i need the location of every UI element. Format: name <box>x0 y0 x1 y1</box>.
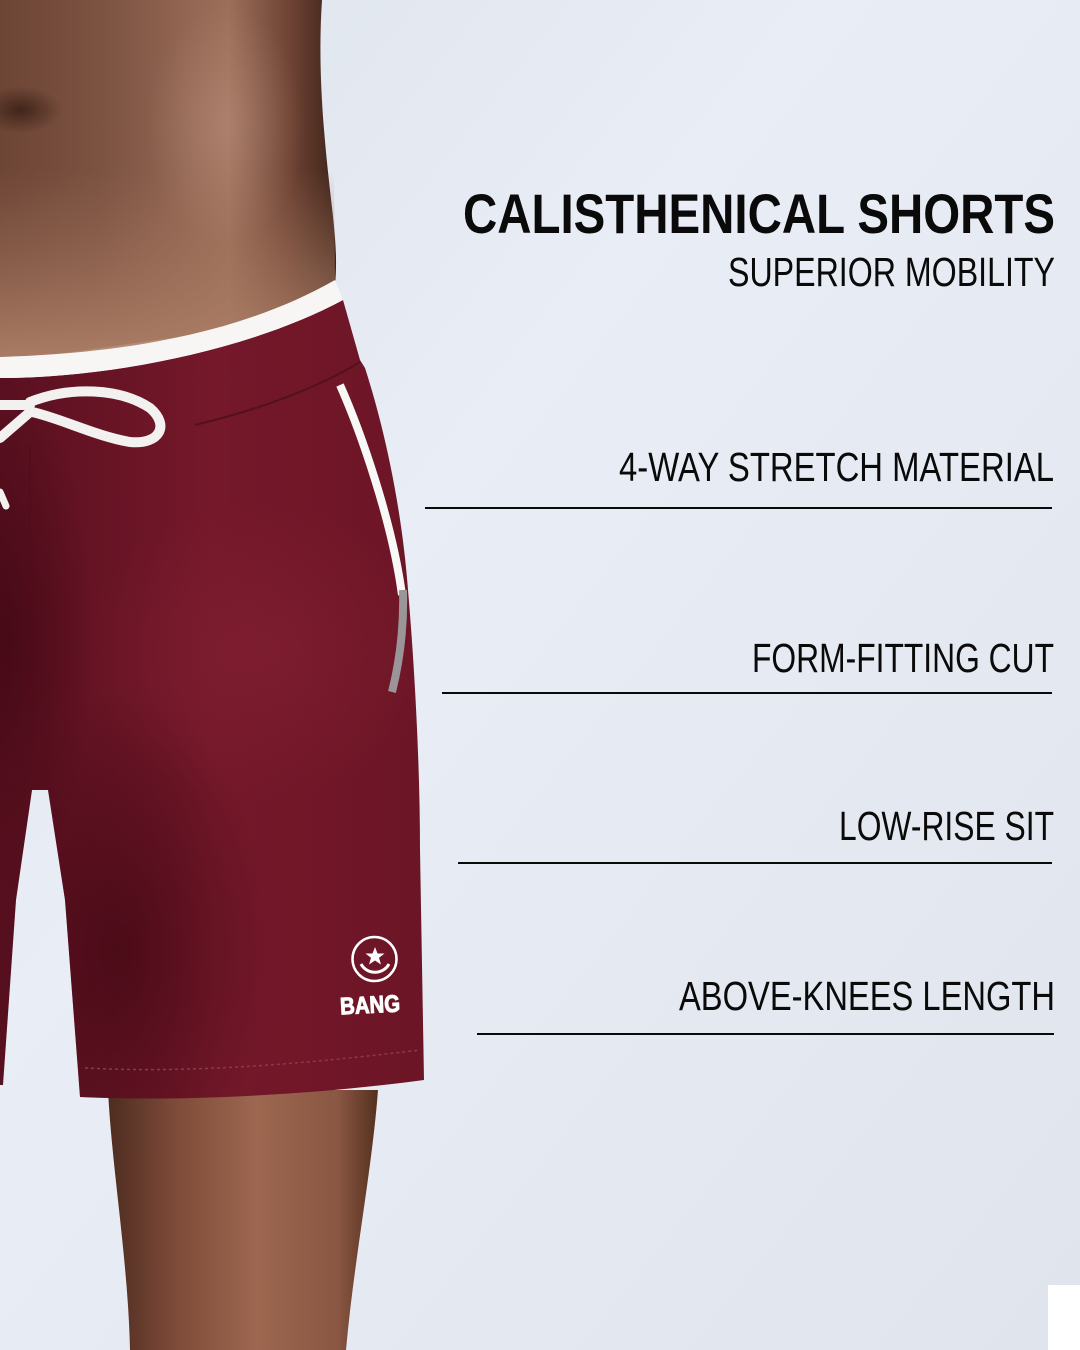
shorts body <box>0 300 424 1098</box>
hem stitching <box>85 1050 420 1070</box>
white waistband trim <box>0 280 343 378</box>
torso <box>0 0 336 362</box>
shorts logo <box>339 937 401 1021</box>
model photo illustration <box>0 0 440 1350</box>
lower leg <box>108 1090 378 1350</box>
drawstring <box>0 391 160 506</box>
waistband seam <box>195 362 360 425</box>
white corner block <box>1048 1285 1080 1350</box>
fly seam <box>29 445 31 740</box>
pocket piping <box>340 385 402 595</box>
shorts logo: BANG <box>339 990 401 1021</box>
